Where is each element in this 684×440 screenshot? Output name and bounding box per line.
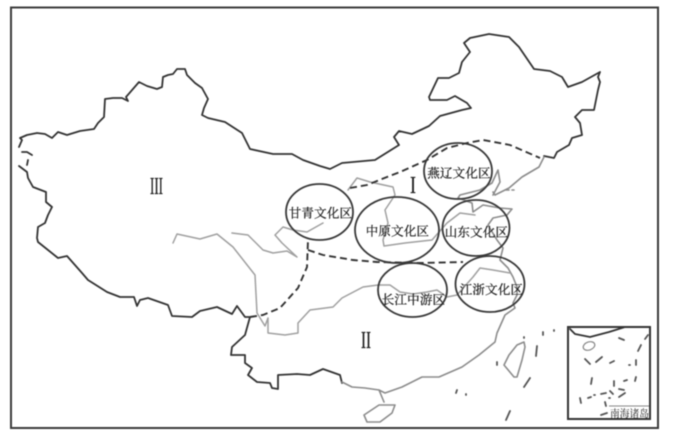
coastline — [342, 157, 544, 402]
region circle: 甘青文化区: 甘青文化区 — [289, 206, 352, 220]
inset map: South China Sea islands — [568, 327, 650, 420]
dashed region boundaries — [250, 140, 540, 317]
offshore islands — [456, 330, 554, 420]
region circle: 长江中游区 — [378, 263, 447, 317]
region circle: 江浙文化区 — [456, 256, 524, 312]
region circle: 江浙文化区: 江浙文化区 — [460, 282, 523, 297]
region circle: 燕辽文化区: 燕辽文化区 — [427, 166, 491, 180]
region circle: 山东文化区: 山东文化区 — [445, 226, 508, 240]
Hainan island — [364, 405, 395, 422]
region circle: 山东文化区 — [442, 200, 510, 256]
inset caption: 南海诸岛: 南海诸岛 — [610, 407, 649, 420]
region circle: 中原文化区: 中原文化区 — [366, 224, 429, 238]
numeral I: I — [410, 173, 416, 199]
numeral II: II — [361, 328, 371, 354]
region circle: 中原文化区 — [355, 197, 439, 263]
national border: land boundary — [19, 34, 600, 389]
Taiwan island — [504, 342, 525, 377]
rivers — [173, 178, 510, 335]
region circle: 长江中游区: 长江中游区 — [382, 292, 445, 307]
region circle: 燕辽文化区 — [424, 143, 492, 199]
numeral III: III — [150, 174, 163, 200]
region circle: 甘青文化区 — [286, 184, 353, 240]
